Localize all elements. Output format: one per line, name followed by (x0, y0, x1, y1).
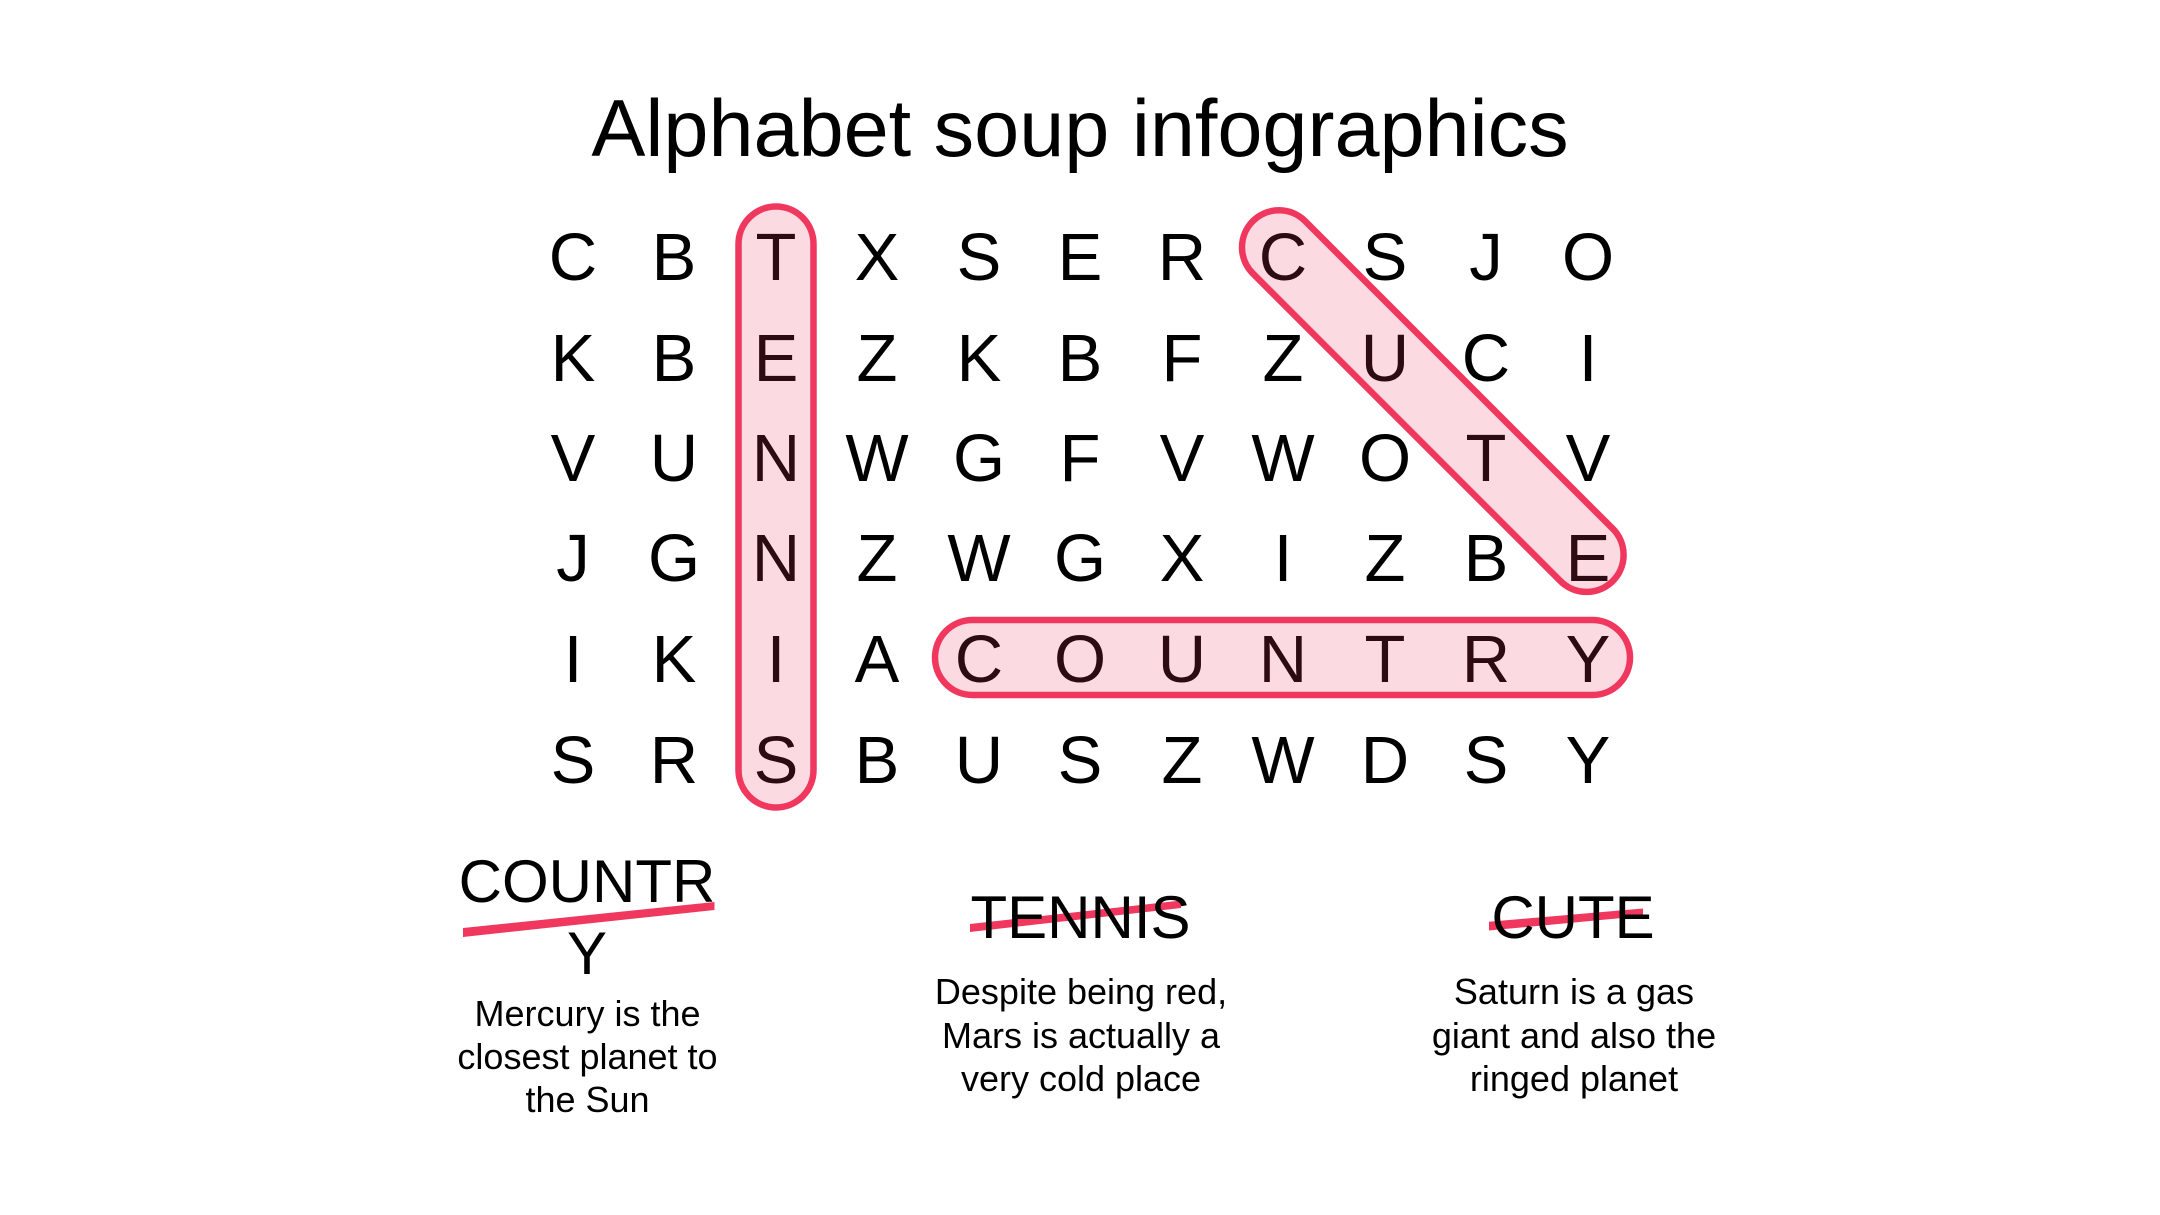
letter grid: R (1462, 622, 1510, 697)
letter grid: C (1462, 321, 1510, 396)
description: Mercury (457, 993, 718, 1120)
description: Saturn: ringed planet (1470, 1058, 1678, 1099)
letter grid: F (1162, 321, 1202, 396)
description: Mars: Mars is actually a (942, 1015, 1221, 1056)
letter grid: I (564, 622, 582, 697)
letter grid: F (1060, 421, 1100, 496)
letter grid: U (1158, 622, 1206, 697)
description: Saturn (1432, 971, 1716, 1099)
letter grid: S (1058, 723, 1102, 798)
word: TENNIS: TENNIS (970, 884, 1191, 951)
letter grid: K (652, 622, 696, 697)
letter grid: R (1158, 220, 1206, 295)
highlight: TENNIS (738, 206, 814, 808)
letter grid: B (1464, 521, 1508, 596)
letter grid: G (1054, 521, 1106, 596)
letter grid: B (652, 321, 696, 396)
description: Saturn: Saturn is a gas (1454, 971, 1694, 1012)
letter grid: W (1251, 421, 1315, 496)
letter grid: C (1259, 220, 1307, 295)
letter grid: C (955, 622, 1003, 697)
letter grid: U (1361, 321, 1409, 396)
letter grid: B (1058, 321, 1102, 396)
letter grid: U (955, 723, 1003, 798)
letter grid: D (1361, 723, 1409, 798)
description: Mercury: the Sun (525, 1079, 650, 1120)
letter grid: E (754, 321, 798, 396)
letter grid: T (1365, 622, 1405, 697)
letter grid (549, 220, 1614, 798)
description: Mars: Despite being red, (935, 971, 1227, 1012)
description: Mercury: closest planet to (457, 1036, 718, 1077)
letter grid: O (1562, 220, 1614, 295)
title: Alphabet soup infographics (591, 84, 1569, 174)
letter grid: W (845, 421, 909, 496)
letter grid: I (767, 622, 785, 697)
letter grid: N (1259, 622, 1307, 697)
letter grid: G (953, 421, 1005, 496)
letter grid: Y (1566, 723, 1610, 798)
letter grid: N (752, 521, 800, 596)
letter grid: K (551, 321, 595, 396)
letter grid: Z (1162, 723, 1202, 798)
letter grid: S (1464, 723, 1508, 798)
word: COUNTRY: Y (567, 920, 607, 987)
letter grid: S (957, 220, 1001, 295)
description: Mercury: Mercury is the (474, 993, 701, 1034)
letter grid: X (855, 220, 899, 295)
letter grid: O (1054, 622, 1106, 697)
letter grid: W (1251, 723, 1315, 798)
letter grid: A (855, 622, 900, 697)
letter grid: Z (857, 321, 897, 396)
letter grid: B (652, 220, 696, 295)
description: Mars (935, 971, 1227, 1099)
highlight: CUTE (1227, 195, 1639, 607)
letter grid: S (551, 723, 595, 798)
letter grid: V (1160, 421, 1205, 496)
letter grid: I (1579, 321, 1597, 396)
letter grid: G (648, 521, 700, 596)
letter grid: J (1469, 220, 1503, 295)
letter grid: C (549, 220, 597, 295)
letter grid: E (1058, 220, 1102, 295)
letter grid: V (1566, 421, 1611, 496)
letter grid: B (855, 723, 899, 798)
letter grid: N (752, 421, 800, 496)
letter grid: Y (1566, 622, 1610, 697)
letter grid: S (1363, 220, 1407, 295)
letter grid: U (650, 421, 698, 496)
description: Saturn: giant and also the (1432, 1015, 1716, 1056)
letter grid: W (947, 521, 1011, 596)
letter grid: T (1466, 421, 1506, 496)
letter grid: T (756, 220, 796, 295)
word: COUNTRY (459, 848, 715, 987)
highlight: COUNTRY (935, 620, 1630, 695)
letter grid: V (551, 421, 596, 496)
letter grid: E (1566, 521, 1610, 596)
letter grid: I (1274, 521, 1292, 596)
letter grid: J (556, 521, 590, 596)
letter grid: S (754, 723, 798, 798)
letter grid: Z (857, 521, 897, 596)
description: Mars: very cold place (961, 1058, 1201, 1099)
letter grid: O (1359, 421, 1411, 496)
word: CUTE: CUTE (1491, 884, 1655, 951)
letter grid: Z (1263, 321, 1303, 396)
letter grid: Z (1365, 521, 1405, 596)
letter grid: K (957, 321, 1001, 396)
word: COUNTRY: COUNTR (459, 848, 715, 915)
letter grid: X (1160, 521, 1204, 596)
letter grid: R (650, 723, 698, 798)
